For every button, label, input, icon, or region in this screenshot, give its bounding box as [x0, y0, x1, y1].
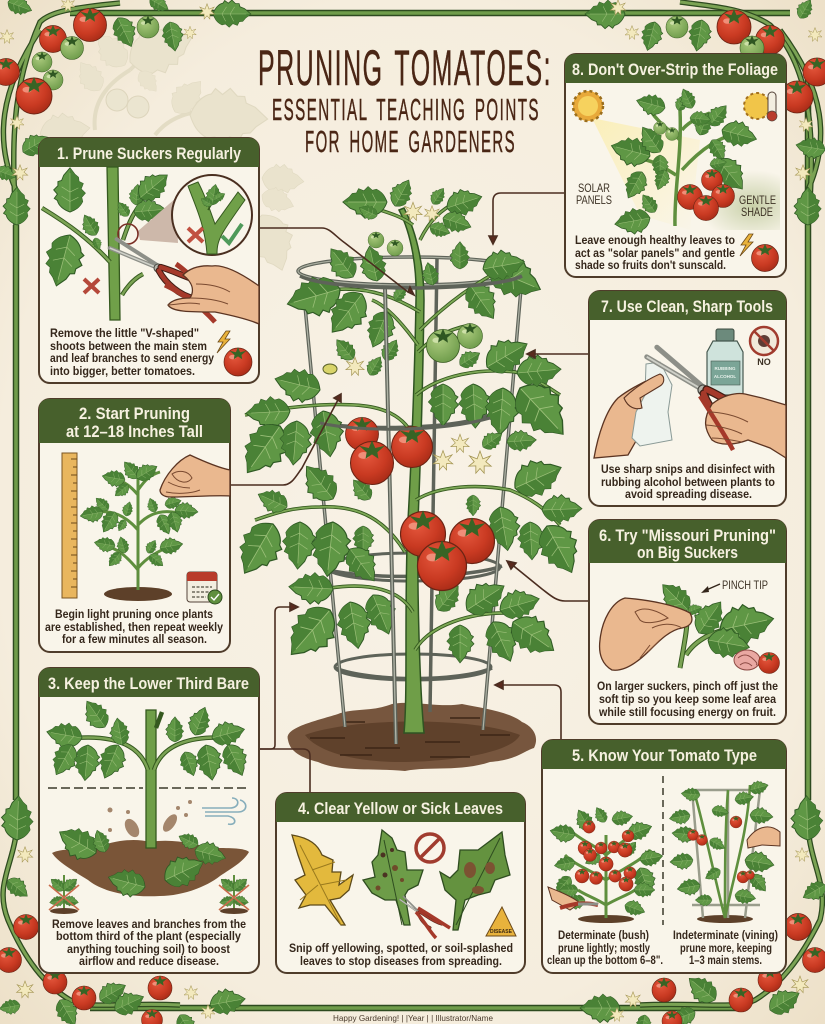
hand pinching tip — [600, 598, 692, 670]
panel 2 heading: 2. Start Pruning — [79, 404, 190, 423]
central tomato plant in cage — [228, 175, 589, 771]
pinch tip label: PINCH TIP — [722, 578, 768, 592]
panel 4 heading — [276, 793, 525, 822]
panel 8 heading: 8. Don't Over-Strip the Foliage — [572, 60, 778, 79]
shears handles — [165, 264, 215, 322]
panel 7 text — [601, 463, 775, 501]
sharp snips — [642, 338, 776, 447]
panel 5 text: Indeterminate (vining) — [673, 929, 778, 942]
hand pinching shoot — [160, 455, 230, 497]
icon: energy to tomato — [740, 234, 778, 272]
labels: solar panels and gentle shade — [576, 181, 776, 219]
panel 7 text: avoid spreading disease. — [625, 488, 752, 501]
panel 3 text: bottom third of the plant (especially — [56, 930, 242, 943]
pruning stem with leaves — [39, 165, 175, 320]
soil splash — [108, 800, 192, 840]
ruler — [62, 453, 77, 598]
panel 6 text — [597, 680, 778, 719]
panel 1 heading: 1. Prune Suckers Regularly — [57, 144, 241, 163]
panel 4 text: leaves to stop diseases from spreading. — [300, 955, 502, 968]
panel 6 text: while still focusing energy on fruit. — [598, 706, 776, 719]
labels: solar panels and gentle shade: SOLAR — [578, 181, 610, 195]
panel 2 text: for a few minutes all season. — [62, 633, 207, 646]
panel 6 text: soft tip so you keep some leaf area — [599, 693, 777, 706]
panel 5 text: prune more, keeping — [680, 942, 772, 955]
panel 1: prune suckers regularly — [39, 138, 259, 383]
panel 2: start pruning at 12-18 inches — [39, 399, 230, 652]
icon: brain and tomato — [734, 650, 780, 674]
indeterminate vining plant with trellis — [668, 778, 776, 923]
sun and sunlight rays — [573, 91, 700, 230]
panel 6 heading: 6. Try "Missouri Pruning" — [599, 526, 776, 545]
panel 2 heading: at 12–18 Inches Tall — [66, 422, 203, 441]
icon: wind — [202, 798, 246, 824]
magnifier cone — [138, 198, 178, 243]
left hand behind cloth — [594, 378, 660, 458]
panel 5 text: Determinate (bush) — [558, 929, 649, 942]
target circle at sucker — [118, 224, 138, 244]
footer credit line: Happy Gardening! | |Year | | Illustrator/Name — [333, 1013, 493, 1023]
icon: no germs: NO — [757, 357, 771, 367]
panel 7 heading — [589, 291, 786, 320]
icon: energy to tomato — [217, 331, 252, 376]
panel 8 text: Leave enough healthy leaves to — [575, 234, 735, 247]
panel 7 text: rubbing alcohol between plants to — [601, 476, 775, 489]
panel 5 heading — [542, 740, 786, 769]
zoom inset — [172, 175, 252, 255]
soil mound — [52, 840, 249, 896]
panel 1 text: and leaf branches to send energy — [50, 352, 214, 365]
hand pruning vine — [747, 827, 780, 848]
cloth — [632, 362, 672, 446]
panel 2 text: Begin light pruning once plants — [55, 608, 213, 621]
panel 4: clear yellow or sick leaves — [276, 793, 525, 973]
icon: calendar with check — [187, 572, 222, 604]
dashed one-third line — [48, 787, 249, 789]
panel 3 heading — [39, 668, 259, 697]
panel 2 text: are established, then repeat weekly — [45, 621, 223, 634]
connector arrows — [230, 193, 589, 793]
panel 3 text: anything touching soil) to boost — [67, 943, 230, 956]
panel 1 text — [50, 327, 214, 378]
panel 7 heading: 7. Use Clean, Sharp Tools — [601, 297, 773, 316]
pinch tip label — [701, 578, 768, 593]
panel 4 heading: 4. Clear Yellow or Sick Leaves — [298, 799, 503, 818]
panel 3 heading: 3. Keep the Lower Third Bare — [48, 674, 249, 693]
plant with foliage and fruit — [608, 86, 760, 237]
icon: rubbing alcohol bottle: RUBBING — [714, 366, 736, 371]
right hand holding snips — [706, 393, 786, 458]
panel 4 text: Snip off yellowing, spotted, or soil-splashed — [289, 942, 513, 955]
sprig being pinched — [653, 576, 777, 668]
panel 6: Missouri pruning — [589, 520, 786, 724]
panel 6 text: On larger suckers, pinch off just the — [597, 680, 778, 693]
snips — [398, 893, 442, 932]
panel 3 text — [52, 918, 246, 968]
panel 1 text: shoots between the main stem — [50, 340, 207, 353]
icon: prohibited sign — [416, 834, 444, 862]
gentle shade patch — [690, 170, 780, 230]
panel 6 heading: on Big Suckers — [637, 543, 738, 562]
title: FOR HOME GARDENERS — [305, 124, 516, 159]
hand with snips at base — [548, 887, 598, 910]
panel 8 heading — [565, 54, 786, 83]
pruning shears — [107, 231, 219, 307]
panel 8 text: act as "solar panels" and gentle — [575, 247, 735, 260]
panel 2 text — [45, 608, 223, 646]
divider — [662, 776, 664, 925]
panel 5 text: clean up the bottom 6–8". — [547, 954, 663, 967]
panel 3: keep the lower third bare — [39, 668, 259, 973]
icon: no germs — [750, 327, 778, 367]
panel 1 text: into bigger, better tomatoes. — [50, 365, 195, 378]
panel 3 text: airflow and reduce disease. — [79, 955, 219, 968]
labels: solar panels and gentle shade: SHADE — [741, 205, 773, 219]
title: ESSENTIAL TEACHING POINTS — [272, 92, 540, 127]
snips handle and fingers over hand — [700, 396, 748, 450]
spotted leaf — [363, 830, 423, 925]
labels: solar panels and gentle shade: GENTLE — [739, 193, 776, 207]
panel 5 text: 1–3 main stems. — [689, 954, 762, 967]
title — [258, 40, 552, 159]
icon: rubbing alcohol bottle: ALCOHOL — [714, 374, 736, 379]
panel 8 text: shade so fruits don't sunscald. — [575, 259, 726, 272]
fallen leaves — [52, 819, 228, 900]
panel 4 text — [289, 942, 513, 968]
panel 7 text: Use sharp snips and disinfect with — [601, 463, 775, 476]
panel 8 text — [575, 234, 735, 272]
icon: rubbing alcohol bottle — [707, 329, 743, 395]
panel 5 heading: 5. Know Your Tomato Type — [572, 746, 757, 765]
panel 1 text: Remove the little "V-shaped" — [50, 327, 199, 340]
panel 7: use clean, sharp tools — [589, 291, 786, 506]
red X mark — [84, 279, 99, 293]
young plant — [79, 457, 199, 601]
blighted leaf — [440, 832, 510, 930]
icon: crossed small plants — [47, 874, 251, 914]
panel 3 text: Remove leaves and branches from the — [52, 918, 246, 931]
panel 6 heading — [589, 520, 786, 563]
cut plant with arms — [45, 695, 253, 848]
sun with thermometer icon — [744, 92, 777, 121]
snips handles — [416, 908, 450, 938]
icon: warning triangle — [486, 907, 516, 936]
panel 8: don't over-strip the foliage — [565, 54, 786, 277]
labels: solar panels and gentle shade: PANELS — [576, 193, 612, 207]
panel 5: know your tomato type — [542, 740, 786, 973]
panel 5 text: prune lightly; mostly — [558, 942, 650, 955]
panel 1 heading — [39, 138, 259, 167]
left hand fingers over cloth — [624, 374, 664, 409]
faded background plant illustration — [37, 14, 305, 277]
panel 2 heading — [39, 399, 230, 443]
icon: warning triangle: DISEASE — [490, 929, 513, 935]
hand with shears — [168, 266, 259, 324]
panel 5 text — [547, 929, 778, 967]
determinate bush plant — [549, 805, 664, 923]
yellow leaf — [292, 835, 353, 925]
